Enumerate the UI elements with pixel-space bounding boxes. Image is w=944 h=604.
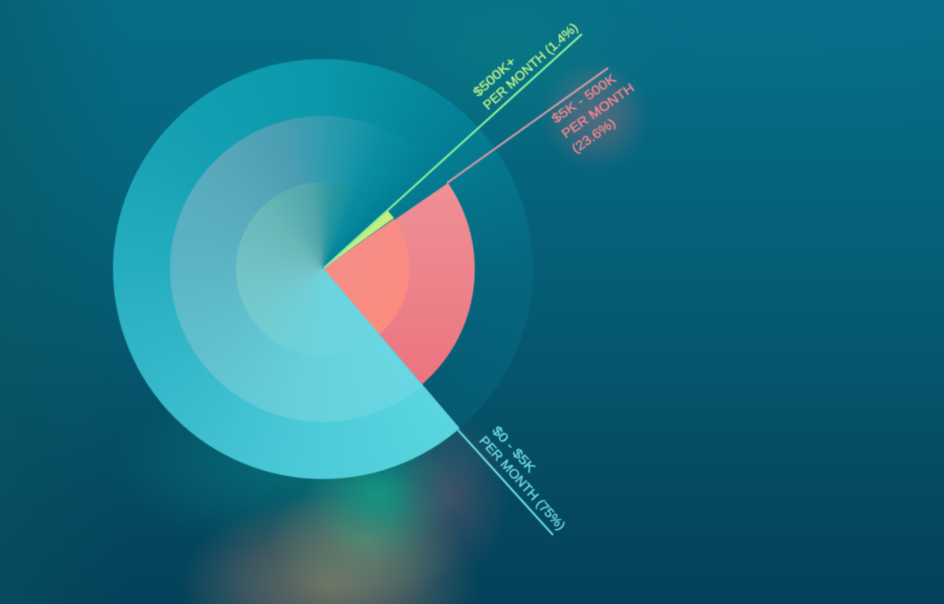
leader line: salmon [447,68,608,183]
background glow: behind salmon label [540,60,650,170]
label: $5K - 500K [549,71,637,156]
wedge edge: cyan seam along the slice [323,269,459,428]
middle ring of the pie [170,116,476,422]
background glow: bottom colour haze [100,370,550,604]
label: $5K - 500K: (23.6%) [569,115,618,156]
wedge: $5K - 500K outer [323,183,475,385]
leader line: cyan [458,430,553,535]
wedge: $5K - 500K inner [323,219,410,334]
label: $500K+: PER MONTH (1.4%) [480,20,581,113]
wedge: $500K+ [323,211,394,269]
leader line: green [324,34,582,268]
label: $500K+: $500K+ [470,54,519,100]
label: $0 - $5K: PER MONTH (75%) [476,433,569,533]
label: $5K - 500K: PER MONTH [559,80,637,141]
outer ring of the pie [113,59,533,479]
inner ring of the pie [236,182,410,356]
label: $5K - 500K: $5K - 500K [549,71,619,126]
label: $0 - $5K: $0 - $5K [489,423,539,476]
